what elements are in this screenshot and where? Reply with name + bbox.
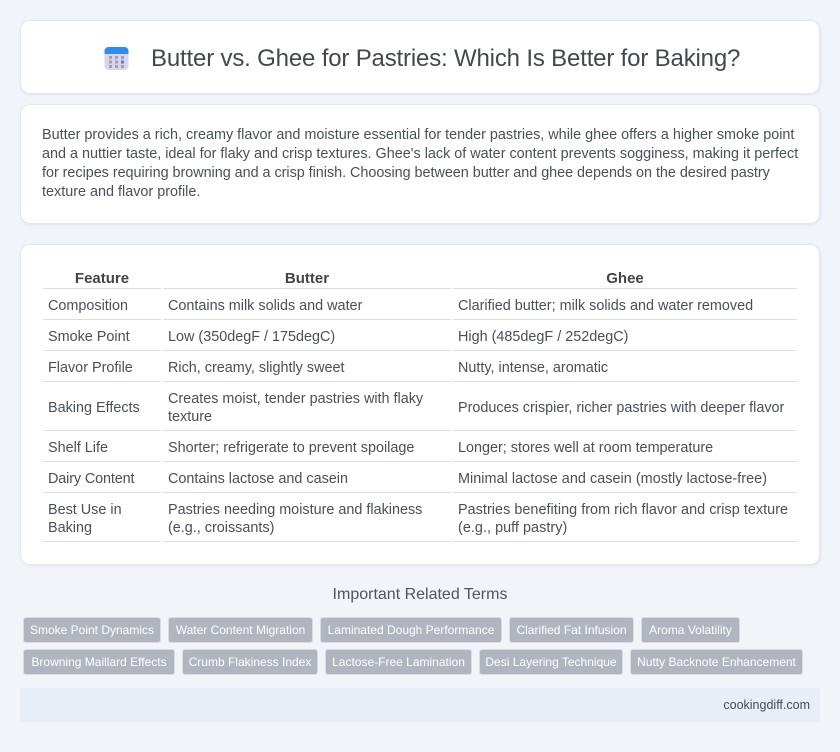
comparison table: Clarified butter; milk solids and water removed — [458, 298, 753, 314]
comparison table: Nutty, intense, aromatic — [458, 360, 608, 376]
comparison table: High (485degF / 252degC) — [458, 329, 628, 345]
related terms tags: Lactose-Free Lamination — [332, 655, 465, 669]
comparison table: (e.g., croissants) — [168, 520, 274, 536]
comparison table: Feature — [75, 270, 129, 287]
title: Butter vs. Ghee for Pastries: Which Is Better for Baking? — [151, 45, 740, 72]
comparison table: Contains milk solids and water — [168, 298, 362, 314]
footer bar — [20, 688, 820, 722]
related terms tags: Water Content Migration — [176, 623, 305, 637]
comparison table: Baking Effects — [48, 400, 140, 416]
comparison table: Baking — [48, 520, 92, 536]
intro text: texture and flavor profile. — [42, 184, 200, 200]
related terms tags: Browning Maillard Effects — [31, 655, 167, 669]
comparison table: Creates moist, tender pastries with flaky — [168, 391, 423, 407]
comparison table: Low (350degF / 175degC) — [168, 329, 335, 345]
related terms tags: Nutty Backnote Enhancement — [637, 655, 796, 669]
comparison table: Rich, creamy, slightly sweet — [168, 360, 344, 376]
comparison table: Best Use in — [48, 502, 122, 518]
related terms tags: Aroma Volatility — [649, 623, 732, 637]
comparison table: Contains lactose and casein — [168, 471, 348, 487]
comparison table: Produces crispier, richer pastries with deeper flavor — [458, 400, 784, 416]
comparison table: Pastries benefiting from rich flavor and crisp texture — [458, 502, 788, 518]
comparison table: Butter — [285, 270, 329, 287]
comparison table: (e.g., puff pastry) — [458, 520, 567, 536]
comparison table: Longer; stores well at room temperature — [458, 440, 713, 456]
comparison table: Dairy Content — [48, 471, 134, 487]
comparison table: Shorter; refrigerate to prevent spoilage — [168, 440, 414, 456]
comparison table: Flavor Profile — [48, 360, 133, 376]
footer source: cookingdiff.com — [723, 698, 810, 712]
intro text: for recipes requiring browning and a crisp finish. Choosing between butter and ghee depends on the desired pastry — [42, 165, 770, 181]
comparison table: Ghee — [606, 270, 644, 287]
comparison table: Smoke Point — [48, 329, 130, 345]
comparison table: texture — [168, 409, 212, 425]
intro panel — [20, 104, 820, 224]
comparison table: Composition — [48, 298, 128, 314]
title panel — [20, 20, 820, 94]
related terms tags: Clarified Fat Infusion — [516, 623, 627, 637]
icon: calendar — [104, 47, 128, 70]
comparison table panel — [20, 244, 820, 565]
related terms tags: Crumb Flakiness Index — [189, 655, 311, 669]
related terms tags: Laminated Dough Performance — [328, 623, 494, 637]
related terms tags: Smoke Point Dynamics — [30, 623, 154, 637]
comparison table: Shelf Life — [48, 440, 108, 456]
related terms tags: Desi Layering Technique — [485, 655, 617, 669]
related terms tags — [23, 617, 803, 675]
intro text: Butter provides a rich, creamy flavor and moisture essential for tender pastries, while ghee offers a higher smoke point — [42, 127, 794, 143]
comparison table: Minimal lactose and casein (mostly lactose-free) — [458, 471, 767, 487]
intro text: and a nuttier taste, ideal for flaky and crisp textures. Ghee's lack of water content prevents sogginess, making it perfect — [42, 146, 798, 162]
intro text — [42, 127, 798, 200]
related terms heading: Important Related Terms — [333, 586, 507, 603]
comparison table: Pastries needing moisture and flakiness — [168, 502, 422, 518]
